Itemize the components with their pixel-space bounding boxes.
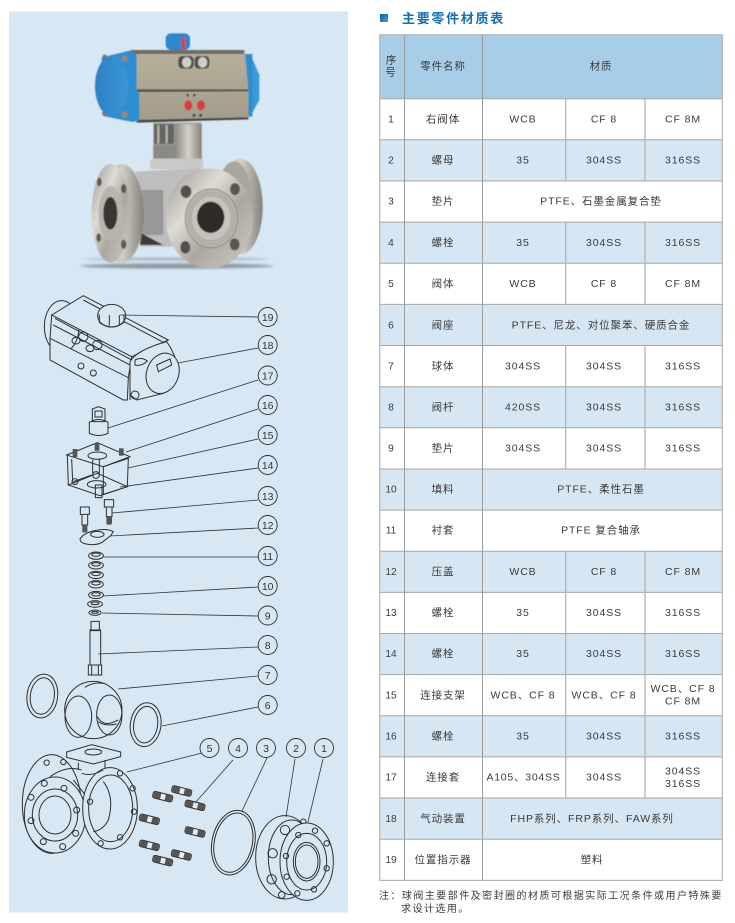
callout numbers: 16	[262, 400, 274, 412]
row 12: CF 8	[591, 566, 617, 578]
row 19: 塑料	[581, 853, 603, 866]
row 16: 304SS	[586, 730, 622, 742]
row 13: 316SS	[665, 607, 701, 619]
row 17: 316SS	[665, 778, 701, 790]
row 18: FHP系列、FRP系列、FAW系列	[510, 812, 674, 825]
row 12: 压盖	[432, 565, 454, 578]
footnote	[379, 889, 723, 915]
callout numbers: 14	[262, 460, 274, 472]
row 16: 316SS	[665, 730, 701, 742]
row 6: PTFE、尼龙、对位聚苯、硬质合金	[512, 318, 690, 331]
row 9: 9	[388, 443, 394, 454]
row 15: WCB、CF 8	[572, 689, 636, 701]
callout leaders	[98, 315, 323, 822]
row 8: 420SS	[505, 401, 541, 413]
table header: 序	[386, 53, 396, 66]
row 4: 螺栓	[432, 236, 454, 249]
row 14: 螺栓	[432, 647, 454, 660]
callout numbers: 5	[207, 743, 213, 755]
row 19	[380, 839, 722, 880]
row 5: CF 8M	[665, 278, 701, 290]
row 11: PTFE 复合轴承	[561, 523, 641, 536]
row 5: WCB	[509, 278, 537, 290]
row 11: 衬套	[432, 523, 454, 536]
part 1-2: right body and nuts	[256, 816, 333, 900]
valve neck and bracket	[135, 123, 213, 247]
footnote: 注：球阀主要部件及密封圈的材质可根据实际工况条件或用户特殊要	[379, 889, 723, 902]
row 3: 垫片	[432, 194, 454, 207]
part 9: rings	[88, 601, 102, 615]
row 16	[380, 716, 722, 757]
callout numbers: 2	[293, 743, 299, 755]
part 3: gasket	[206, 806, 261, 879]
row 3: PTFE、石墨金属复合垫	[540, 194, 662, 207]
callout numbers: 18	[262, 340, 274, 352]
row 14: 35	[516, 648, 530, 660]
callout numbers: 12	[262, 520, 274, 532]
row 16: 35	[516, 730, 530, 742]
exploded view: upper parts	[44, 296, 185, 599]
row 9: 316SS	[665, 442, 701, 454]
row 10	[380, 469, 722, 510]
row 2: 35	[516, 154, 530, 166]
back flange	[215, 159, 263, 254]
row 12: 12	[385, 567, 397, 578]
row 2: 304SS	[586, 154, 622, 166]
callout numbers: 15	[262, 430, 274, 442]
row 6: 阀座	[432, 318, 454, 331]
row 10: 填料	[432, 482, 454, 495]
row 1: WCB	[509, 113, 537, 125]
row 10: PTFE、柔性石墨	[557, 482, 645, 495]
callout numbers: 19	[262, 312, 274, 324]
row 11	[380, 510, 722, 551]
table header	[380, 35, 722, 99]
row 6: 6	[388, 320, 394, 331]
row 15: 连接支架	[420, 688, 466, 701]
row 7: 304SS	[586, 360, 622, 372]
callout numbers: 4	[235, 743, 241, 755]
row 14	[380, 634, 722, 675]
part 13: bolts	[80, 500, 114, 532]
row 19: 19	[385, 855, 397, 866]
row 9	[380, 428, 722, 469]
callout numbers: 17	[262, 370, 274, 382]
row 17: A105、304SS	[486, 771, 561, 783]
row 5: 阀体	[432, 277, 454, 290]
callout numbers: 7	[265, 670, 271, 682]
row 14: 304SS	[586, 648, 622, 660]
row 11: 11	[386, 525, 397, 536]
row 13	[380, 592, 722, 634]
row 9: 304SS	[586, 442, 622, 454]
actuator blue end caps	[95, 51, 259, 122]
part 10-11: packing rings	[89, 552, 103, 599]
table header: 零件名称	[420, 59, 466, 72]
row 1	[380, 99, 722, 140]
callout numbers: 11	[262, 551, 273, 563]
row 4: 316SS	[665, 237, 701, 249]
row 17	[380, 757, 722, 798]
row 5	[380, 263, 722, 304]
row 3	[380, 181, 722, 222]
part 7: ball	[65, 681, 122, 739]
blue position indicator	[166, 33, 190, 50]
table header: 号	[385, 66, 397, 78]
row 15: WCB、CF 8	[651, 683, 715, 695]
materials table	[380, 35, 722, 880]
row 8	[380, 387, 722, 428]
heading icon	[380, 14, 388, 22]
footnote: 求设计选用。	[401, 902, 470, 915]
row 7: 球体	[432, 359, 454, 372]
row 19: 位置指示器	[414, 853, 472, 866]
row 1: 右阀体	[426, 112, 460, 125]
row 8: 316SS	[665, 401, 701, 413]
row 12	[380, 551, 722, 592]
row 7: 7	[388, 361, 394, 372]
product photo: pneumatic three-way ball valve	[80, 33, 273, 269]
row 6	[380, 304, 722, 346]
row 2: 316SS	[665, 154, 701, 166]
row 15: WCB、CF 8	[491, 689, 555, 701]
row 14: 14	[385, 649, 397, 660]
row 15: CF 8M	[665, 695, 701, 707]
row 2	[380, 140, 722, 181]
row 12: WCB	[509, 566, 537, 578]
row 1: CF 8M	[665, 113, 701, 125]
row 15	[380, 675, 722, 716]
row 18: 18	[385, 814, 397, 825]
row 18	[380, 798, 722, 839]
row 2: 螺母	[432, 154, 454, 166]
row 13: 螺栓	[432, 606, 454, 619]
row 1: CF 8	[591, 113, 617, 125]
row 8: 阀杆	[432, 400, 454, 413]
row 13: 304SS	[586, 607, 622, 619]
row 4: 304SS	[586, 237, 622, 249]
part 14-16: bracket and studs	[67, 443, 130, 498]
row 14: 316SS	[665, 648, 701, 660]
row 5: CF 8	[591, 278, 617, 290]
part 12: gland	[80, 529, 113, 545]
row 12: CF 8M	[665, 566, 701, 578]
exploded view: lower parts	[22, 601, 333, 900]
callout numbers	[200, 308, 334, 758]
part 6: seats	[24, 672, 164, 749]
row 5: 5	[388, 279, 394, 290]
callout numbers: 1	[321, 743, 327, 755]
callout numbers: 9	[265, 610, 271, 622]
part 8: stem	[88, 621, 102, 675]
row 4	[380, 222, 722, 263]
part 4: studs	[139, 785, 206, 866]
row 15: 15	[385, 690, 397, 701]
callout numbers: 3	[263, 743, 269, 755]
part 18-19: actuator	[44, 296, 185, 400]
callout numbers: 6	[265, 700, 271, 712]
callout numbers: 13	[262, 491, 274, 503]
row 8: 8	[388, 402, 394, 413]
row 2: 2	[388, 155, 394, 166]
table grid lines	[380, 35, 722, 880]
row 16: 16	[385, 731, 397, 742]
row 13: 13	[385, 608, 397, 619]
row 17: 连接套	[426, 770, 460, 783]
row 18: 气动装置	[420, 812, 466, 825]
heading: 主要零件材质表	[402, 11, 505, 26]
row 7	[380, 346, 722, 387]
row 9: 304SS	[505, 442, 541, 454]
callout numbers: 10	[262, 581, 274, 593]
row 3: 3	[388, 196, 394, 207]
row 9: 垫片	[432, 441, 454, 454]
left flange	[92, 164, 144, 263]
row 7: 304SS	[505, 360, 541, 372]
row 13: 35	[516, 607, 530, 619]
panel: product illustrations	[9, 12, 348, 912]
part 17: coupling	[89, 407, 108, 435]
row 17: 304SS	[665, 765, 701, 777]
row 17: 17	[385, 772, 397, 783]
part 5: valve body	[22, 745, 137, 853]
row 17: 304SS	[586, 771, 622, 783]
row 4: 4	[388, 238, 394, 249]
table header: 材质	[590, 59, 612, 72]
photo shadow	[80, 257, 273, 269]
actuator aluminium body	[130, 50, 248, 123]
row 16: 螺栓	[432, 729, 454, 742]
row 4: 35	[516, 237, 530, 249]
callout numbers: 8	[265, 640, 271, 652]
row 7: 316SS	[665, 360, 701, 372]
row 1: 1	[388, 114, 394, 125]
row 8: 304SS	[586, 401, 622, 413]
front flange	[166, 168, 253, 268]
row 10: 10	[385, 484, 397, 495]
